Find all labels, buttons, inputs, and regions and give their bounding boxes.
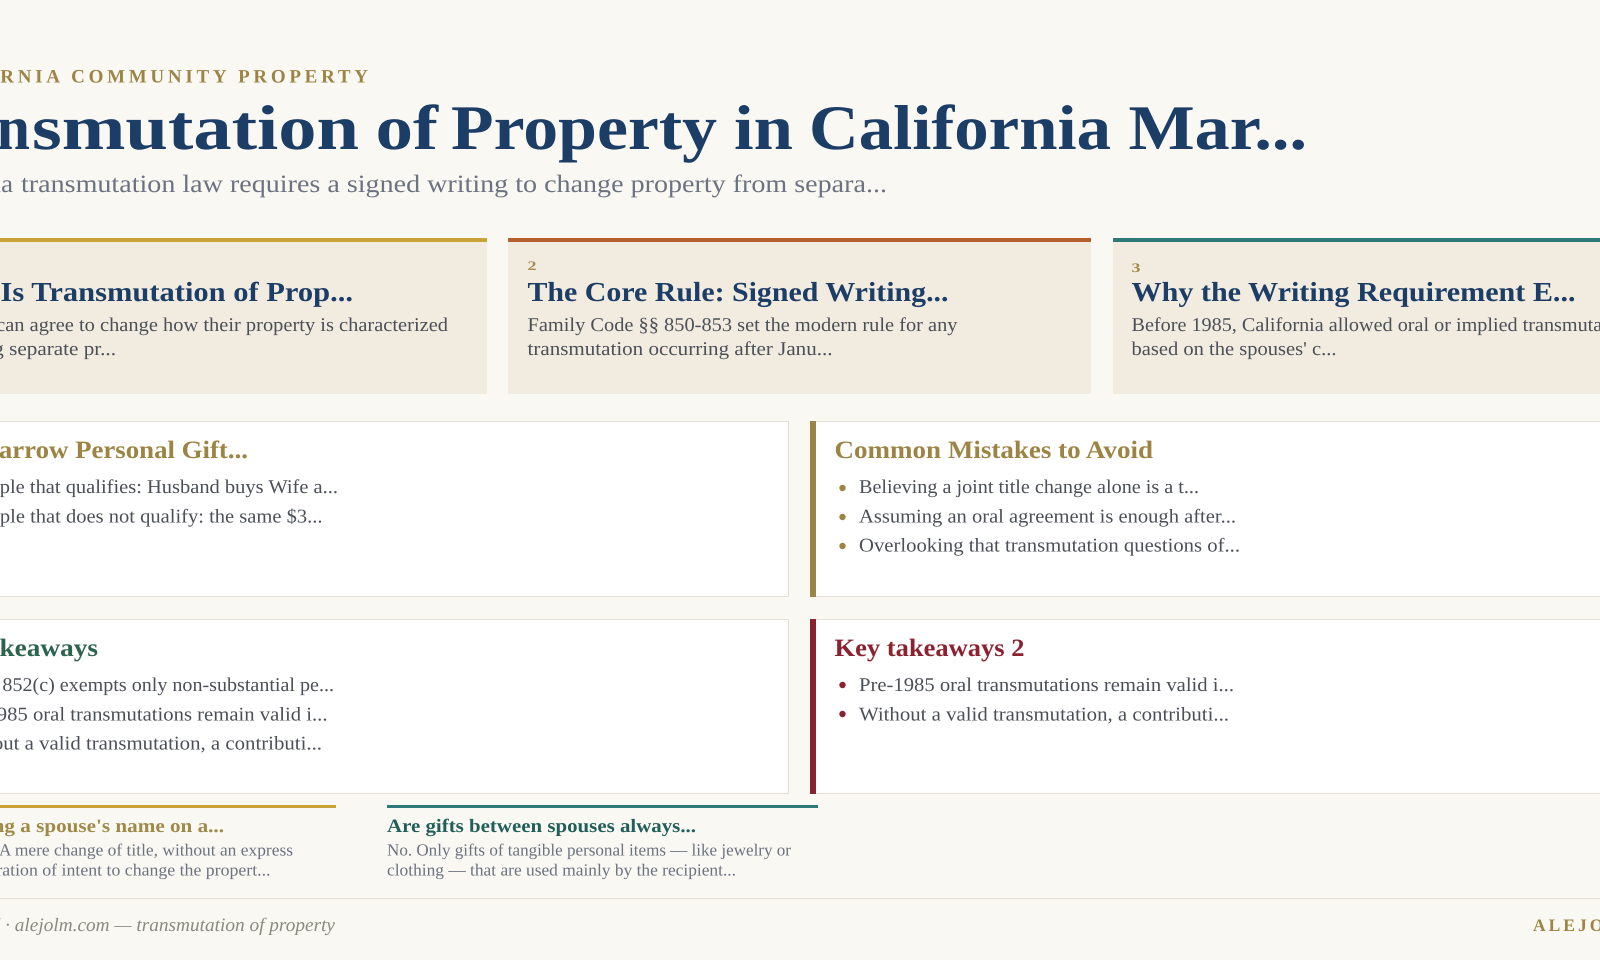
panel heading: Common Mistakes to Avoid xyxy=(834,437,1153,464)
panel: card 3 history xyxy=(1113,238,1600,394)
card 1 body xyxy=(0,315,448,360)
panel: common mistakes xyxy=(810,421,1600,597)
subtitle: transmutation law requires a signed writing to change property from separa... xyxy=(21,171,887,198)
card 2 body xyxy=(528,315,958,360)
list xyxy=(0,675,334,754)
list xyxy=(839,675,1234,725)
list: Overlooking that transmutation questions of... xyxy=(859,536,1240,557)
title: Property xyxy=(451,92,717,163)
card 3 number: 3 xyxy=(1132,260,1141,275)
title: smutation xyxy=(32,92,359,163)
answer xyxy=(0,840,293,880)
card 2 body: transmutation occurring after Janu... xyxy=(528,339,832,360)
card 3 heading: Why the Writing Requirement E... xyxy=(1132,276,1576,308)
footer xyxy=(0,898,1600,936)
answer xyxy=(387,840,791,880)
faq: spouse name on title xyxy=(0,805,336,880)
title xyxy=(0,92,1307,163)
title: California xyxy=(809,92,1111,163)
title: Mar... xyxy=(1128,92,1307,163)
faq: gifts between spouses xyxy=(387,805,818,880)
answer: No. Only gifts of tangible personal items — like jewelry or xyxy=(387,840,791,860)
card 3 body: based on the spouses' c... xyxy=(1132,339,1336,360)
list: Without a valid transmutation, a contributi... xyxy=(859,704,1229,725)
panel: key takeaways xyxy=(0,620,788,794)
card 2 heading: The Core Rule: Signed Writing... xyxy=(528,276,948,308)
panel: card 2 core rule xyxy=(508,238,1091,394)
title: in xyxy=(734,92,793,163)
panel: key takeaways 2 xyxy=(810,619,1600,794)
panel: card 1 definition xyxy=(0,238,487,394)
card 2 body: Family Code §§ 850-853 set the modern rule for any xyxy=(528,315,958,336)
list xyxy=(0,477,338,528)
list: Assuming an oral agreement is enough after... xyxy=(859,506,1236,528)
list: Pre-1985 oral transmutations remain valid i... xyxy=(859,675,1234,696)
question: Are gifts between spouses always... xyxy=(387,816,696,837)
list: Believing a joint title change alone is a t... xyxy=(859,477,1199,498)
card 3 body xyxy=(1132,315,1600,360)
card 2 number: 2 xyxy=(528,258,536,273)
title: of xyxy=(376,92,439,163)
panel heading: Key takeaways 2 xyxy=(834,635,1024,662)
list xyxy=(839,477,1240,557)
panel: narrow personal gift xyxy=(0,422,788,596)
header xyxy=(0,66,1307,198)
answer: clothing — that are used mainly by the recipient... xyxy=(387,860,736,880)
